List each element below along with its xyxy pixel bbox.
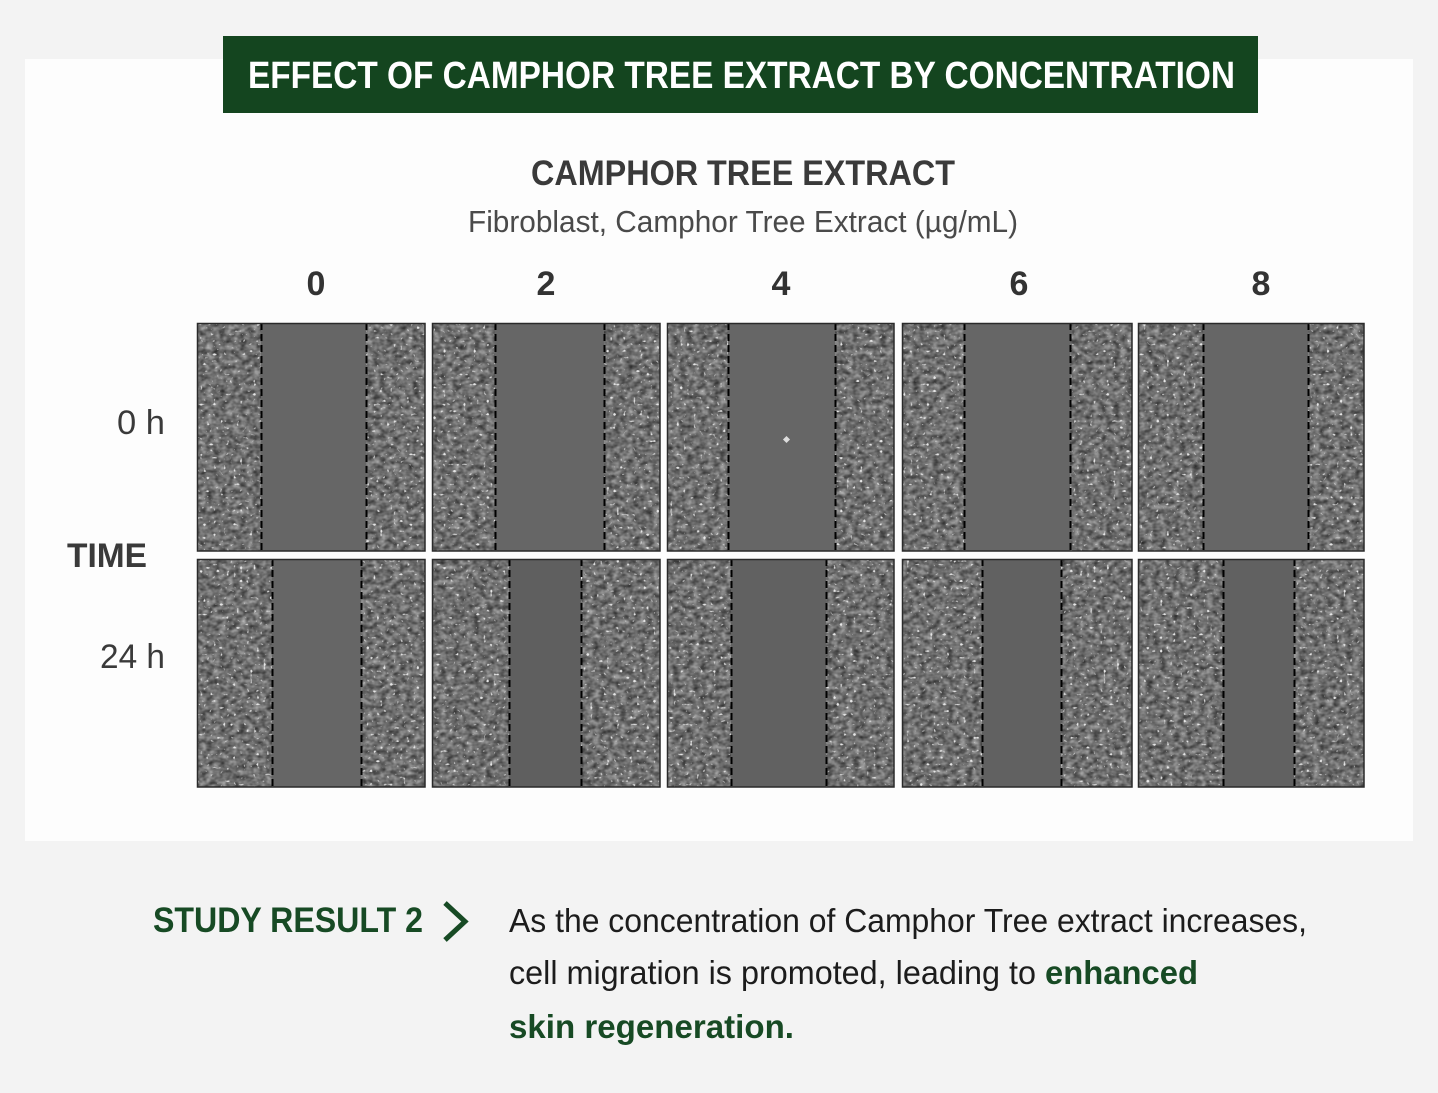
title banner: EFFECT OF CAMPHOR TREE EXTRACT BY CONCENTRATION — [248, 55, 1235, 97]
image: 24 h, concentration 4 — [667, 559, 894, 787]
study result description: skin regeneration. — [509, 1008, 794, 1045]
icon: chevron arrow — [445, 903, 465, 940]
study result description: cell migration is promoted, leading to — [509, 954, 1036, 991]
image: 24 h, concentration 2 — [432, 559, 660, 787]
concentration column labels — [307, 265, 1270, 303]
label: study result 2: STUDY RESULT 2 — [153, 901, 423, 940]
image: 24 h, concentration 0 — [197, 559, 425, 787]
study result description — [509, 902, 1307, 1045]
image: 0 h, concentration 0 — [197, 323, 425, 551]
image: 0 h, concentration 2 — [432, 323, 660, 551]
image: 24 h, concentration 6 — [902, 559, 1132, 787]
image: 0 h, concentration 6 — [902, 323, 1132, 551]
image row: 24 h — [197, 559, 1364, 787]
concentration column labels: 4 — [772, 265, 791, 303]
heading: camphor tree extract: CAMPHOR TREE EXTRACT — [531, 154, 955, 193]
subheading: units: Fibroblast, Camphor Tree Extract (µg/mL) — [468, 204, 1018, 239]
image row: 0 h — [197, 323, 1364, 551]
time axis labels — [67, 404, 165, 676]
concentration column labels: 2 — [537, 265, 555, 303]
concentration column labels: 8 — [1252, 265, 1270, 303]
image: 0 h, concentration 4 — [667, 323, 894, 551]
time axis labels: 0 h — [117, 404, 165, 442]
time axis labels: TIME — [67, 537, 147, 575]
study result description: As the concentration of Camphor Tree extract increases, — [509, 902, 1307, 939]
microscopy image grid — [197, 323, 1364, 787]
time axis labels: 24 h — [100, 638, 165, 676]
image: 0 h, concentration 8 — [1138, 323, 1364, 551]
title banner — [223, 36, 1258, 113]
image: 24 h, concentration 8 — [1138, 559, 1364, 787]
panel: white chart card — [25, 59, 1413, 841]
study result description: enhanced — [1045, 954, 1198, 991]
concentration column labels: 6 — [1010, 265, 1028, 303]
concentration column labels: 0 — [307, 265, 325, 303]
